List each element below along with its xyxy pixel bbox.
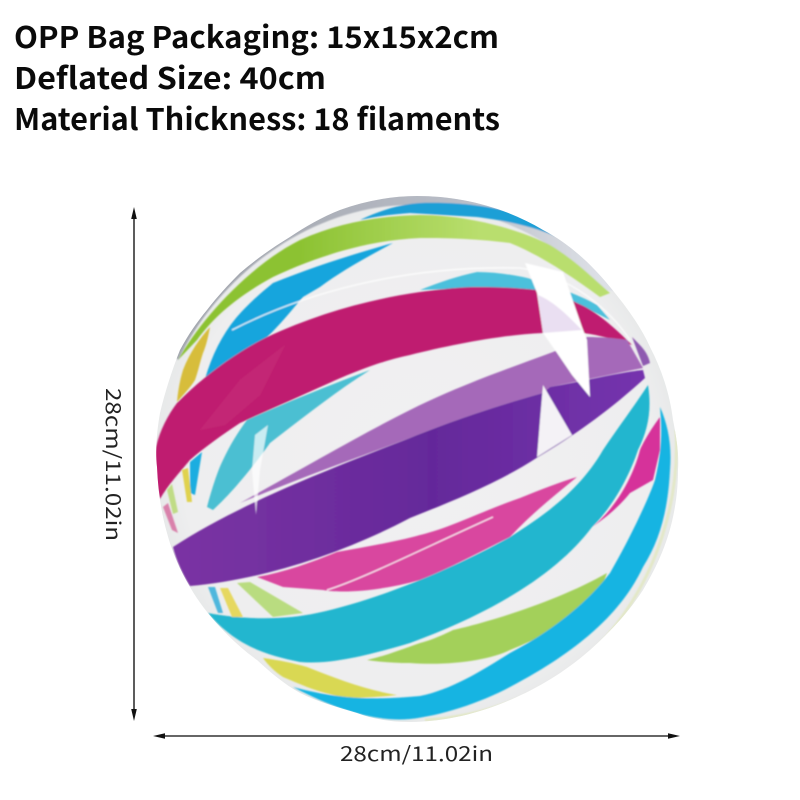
ball body	[150, 190, 685, 730]
infographic canvas	[16, 24, 680, 764]
heading: packaging size: OPP Bag Packaging: 15x15x2cm	[14, 13, 499, 57]
stripe: top blue	[360, 203, 557, 237]
fan: green	[237, 582, 303, 617]
fan: blue	[190, 452, 202, 495]
stripe: crimson band	[155, 287, 632, 499]
fan: blue	[208, 587, 223, 613]
fan: yellow	[220, 588, 243, 617]
specification text block	[14, 13, 500, 139]
dimension: width label: 28cm/11.02in	[340, 738, 493, 767]
stripe: teal band	[208, 385, 650, 663]
fan: green	[167, 484, 178, 514]
dimension: width arrow	[153, 733, 680, 739]
highlight: lilac reflection	[538, 295, 582, 333]
top rim tint	[170, 192, 625, 360]
beach ball illustration	[150, 190, 685, 730]
small fan stripes at lower left	[208, 582, 303, 617]
stripe: light purple band	[240, 337, 643, 503]
highlight: seam lines	[232, 268, 630, 590]
stripe: upper right cyan	[420, 272, 610, 320]
stripe: top green	[178, 215, 610, 360]
stripe: lower yellow	[263, 658, 397, 698]
stripe: far right pink	[592, 417, 660, 527]
stripe: teal wedge under crimson	[207, 370, 370, 510]
highlight: upper right white wedge	[525, 263, 590, 397]
heading: material thickness: Material Thickness: 18 filaments	[14, 95, 500, 139]
stripe: upper left blue	[205, 243, 393, 379]
stripe: far right purple sliver	[632, 337, 650, 366]
stripe: upper left yellow	[177, 327, 210, 402]
outer right rim	[425, 430, 676, 720]
small fan stripes on left	[163, 452, 202, 533]
stripe: blue outer band	[293, 407, 671, 720]
highlight: crimson reflection	[200, 345, 285, 430]
highlight: center white wedge	[537, 385, 572, 457]
stripe: pink lower band	[257, 477, 577, 592]
fan: yellow	[182, 468, 192, 502]
dimension: height label: 28cm/11.02in	[100, 388, 129, 541]
highlight: lower left glare	[252, 425, 268, 515]
stripe: lower green	[367, 573, 607, 664]
heading: deflated size: Deflated Size: 40cm	[14, 54, 326, 98]
stripe: dark purple band	[173, 370, 645, 586]
dimension: height arrow	[131, 207, 137, 721]
fan: pink	[163, 503, 178, 533]
